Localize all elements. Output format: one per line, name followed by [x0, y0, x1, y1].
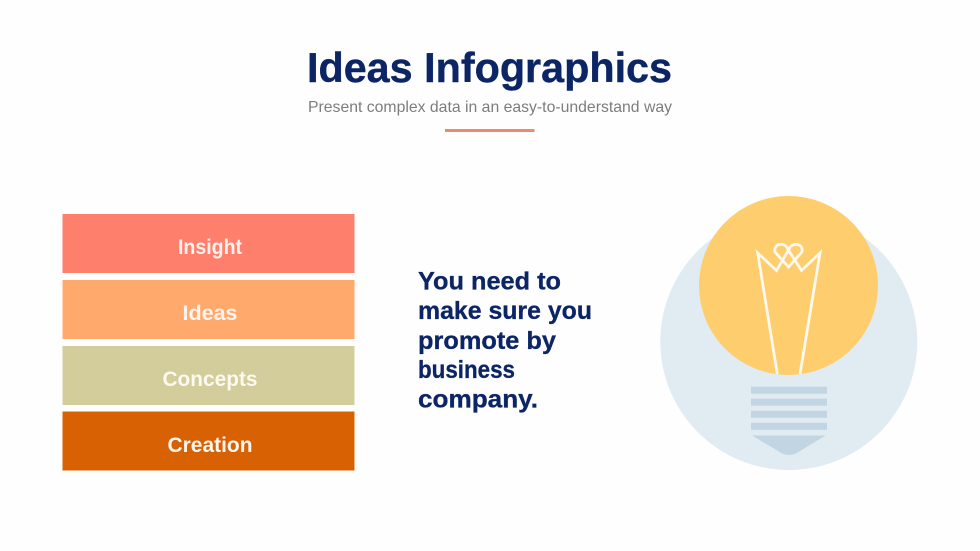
bulb background circle — [660, 213, 917, 470]
text block: message: You need to — [418, 268, 561, 296]
bulb filament — [758, 244, 820, 374]
bar: Ideas: Ideas — [182, 302, 238, 325]
title underline accent — [445, 129, 534, 132]
panel: stacked labels — [62, 214, 354, 470]
bar: Insight — [62, 214, 354, 273]
title: Ideas Infographics — [307, 44, 672, 91]
text block: message: promote by — [418, 327, 556, 355]
text block: message: make sure you — [418, 297, 592, 325]
bar: Ideas — [62, 280, 354, 339]
text block: message: business — [418, 356, 515, 384]
bulb screw base — [751, 387, 827, 455]
bar: Insight: Insight — [178, 236, 242, 259]
text block: message — [418, 268, 592, 414]
text block: message: company. — [418, 386, 538, 414]
bar: Creation: Creation — [168, 434, 252, 457]
icon: light bulb — [660, 196, 917, 470]
bulb glass — [699, 196, 878, 375]
subtitle: Present complex data in an easy-to-understand way — [308, 99, 672, 116]
bar: Creation — [62, 412, 354, 470]
bar: Concepts: Concepts — [162, 368, 258, 391]
bar: Concepts — [62, 346, 354, 405]
